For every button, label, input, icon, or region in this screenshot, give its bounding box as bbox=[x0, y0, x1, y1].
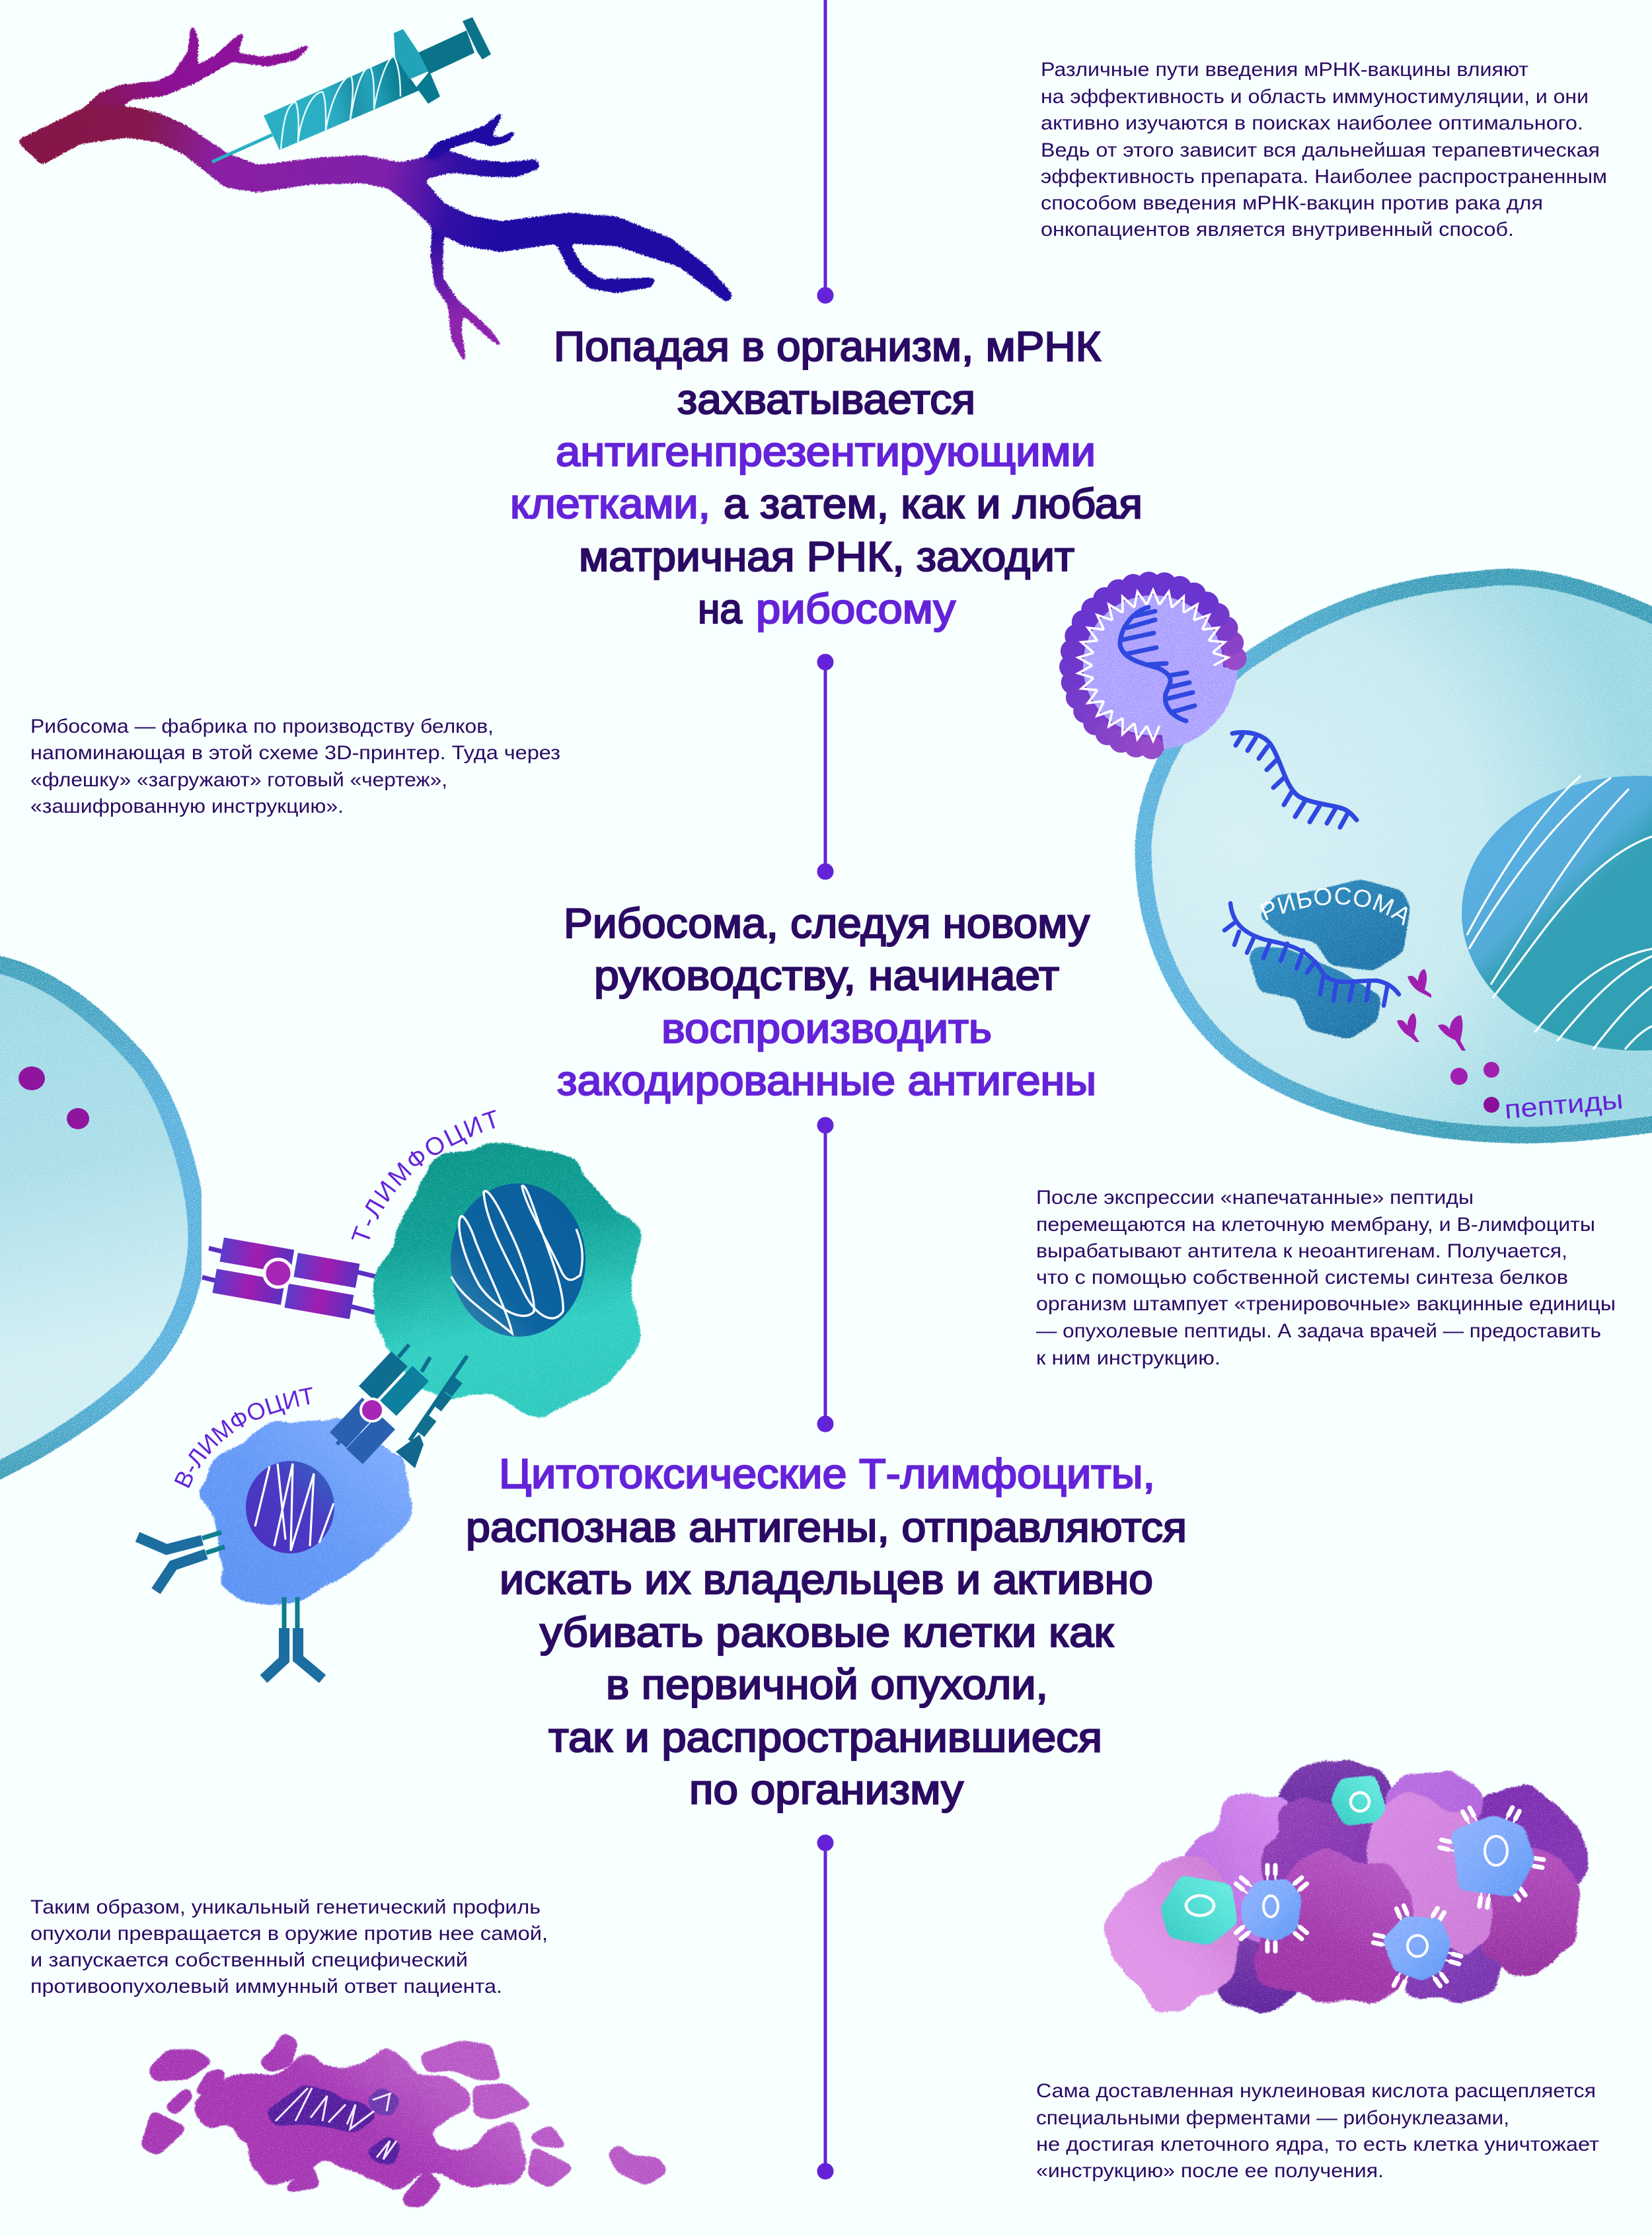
heading: ribosome reproduces antigens: руководству, начинает bbox=[594, 953, 1059, 999]
blue B cell c bbox=[1372, 1905, 1462, 1990]
text block: ribosome explanation bbox=[30, 716, 560, 817]
ribosome label: РИБОСОМА bbox=[1259, 887, 1408, 926]
text block: conclusion left: и запускается собственный специфический bbox=[30, 1949, 468, 1971]
syringe plunger bbox=[415, 30, 474, 74]
text block: peptides and antibodies: к ним инструкцию. bbox=[1036, 1347, 1220, 1369]
heading: cytotoxic T lymphocytes: Цитотоксические Т-лимфоциты, bbox=[499, 1451, 1155, 1497]
heading: mRNA capture: рибосому bbox=[756, 586, 956, 632]
illustration: tumour attacked by lymphocytes bbox=[1104, 1756, 1589, 2015]
heading: cytotoxic T lymphocytes: искать их владельцев и активно bbox=[500, 1557, 1153, 1603]
text block: peptides and antibodies: что с помощью собственной системы синтеза белков bbox=[1036, 1267, 1568, 1288]
heading: mRNA capture: антигенпрезентирующими bbox=[556, 429, 1096, 475]
B cell nucleus bbox=[246, 1461, 334, 1553]
text block: routes of administration: онкопациентов является внутривенный способ. bbox=[1041, 219, 1514, 241]
heading: mRNA capture: а затем, как и любая bbox=[724, 481, 1143, 527]
text block: conclusion left: опухоли превращается в оружие против нее самой, bbox=[30, 1923, 548, 1945]
peptide hearts bbox=[1397, 969, 1466, 1051]
text block: peptides and antibodies: — опухолевые пептиды. А задача врачей — предоставить bbox=[1036, 1320, 1601, 1342]
illustration: B lymphocyte bbox=[135, 1387, 414, 1684]
text block: nucleic acid degradation: специальными ферментами — рибонуклеазами, bbox=[1036, 2107, 1509, 2129]
heading: mRNA capture: клетками, bbox=[510, 481, 710, 527]
text block: routes of administration: Ведь от этого зависит вся дальнейшая терапевтическая bbox=[1041, 139, 1600, 161]
left antibodies bbox=[137, 1532, 225, 1591]
heading: cytotoxic T lymphocytes: по организму bbox=[689, 1767, 964, 1813]
illustration: blood vessel bbox=[21, 27, 730, 361]
text block: routes of administration: эффективность препарата. Наиболее распространенным bbox=[1041, 166, 1607, 188]
illustration: T lymphocyte bbox=[352, 1110, 642, 1419]
heading: mRNA capture: на bbox=[698, 586, 743, 632]
text block: nucleic acid degradation bbox=[1036, 2080, 1599, 2182]
text block: routes of administration: на эффективность и область иммуностимуляции, и они bbox=[1041, 86, 1589, 108]
T cell nucleus bbox=[451, 1183, 585, 1337]
mRNA on ribosome bbox=[1224, 903, 1399, 1006]
tumour cell cluster bbox=[1104, 1756, 1589, 2015]
text block: nucleic acid degradation: Сама доставленная нуклеиновая кислота расщепляется bbox=[1036, 2080, 1596, 2102]
text block: peptides and antibodies bbox=[1036, 1187, 1616, 1369]
heading: cytotoxic T lymphocytes: убивать раковые клетки как bbox=[540, 1610, 1113, 1656]
text block: conclusion left: противоопухолевый иммунный ответ пациента. bbox=[30, 1976, 502, 1997]
white zigzag membrane bbox=[1077, 589, 1229, 741]
teal T cells bbox=[1160, 1775, 1387, 1946]
bumpy lipid ring bbox=[1059, 571, 1248, 760]
text block: peptides and antibodies: перемещаются на клеточную мембрану, и В-лимфоциты bbox=[1036, 1214, 1595, 1236]
ribosome bbox=[1258, 879, 1411, 971]
mRNA inside vesicle bbox=[1120, 607, 1195, 721]
timeline: vertical purple line with dots bbox=[817, 0, 833, 2179]
nucleus fragments bbox=[265, 2084, 402, 2166]
main fragment bbox=[190, 2048, 533, 2194]
heading: ribosome reproduces antigens: Рибосома, следуя новому bbox=[564, 901, 1090, 947]
icon: syringe bbox=[212, 17, 491, 162]
text block: peptides and antibodies: После экспрессии «напечатанные» пептиды bbox=[1036, 1187, 1474, 1209]
heading: cytotoxic T lymphocytes: распознав антигены, отправляются bbox=[466, 1505, 1187, 1551]
nucleus bbox=[1462, 776, 1652, 1051]
text block: conclusion left bbox=[30, 1896, 548, 1997]
T cell body bbox=[370, 1140, 646, 1418]
text block: nucleic acid degradation: не достигая клеточного ядра, то есть клетка уничтожает bbox=[1036, 2134, 1599, 2155]
illustration: left antigen-presenting cell bbox=[0, 961, 197, 1479]
illustration: lipid nanoparticle vesicle bbox=[1059, 571, 1248, 760]
T lymphocyte label: Т-ЛИМФОЦИТ bbox=[352, 1110, 496, 1240]
heading: ribosome reproduces antigens bbox=[557, 901, 1096, 1104]
blue B cell b bbox=[1439, 1807, 1544, 1908]
text block: peptides and antibodies: вырабатывают антитела к неоантигенам. Получается, bbox=[1036, 1240, 1567, 1262]
text block: routes of administration: активно изучаются в поисках наиболее оптимального. bbox=[1041, 112, 1583, 134]
receptor stalk bbox=[410, 1356, 467, 1440]
text block: ribosome explanation: напоминающая в этой схеме 3D-принтер. Туда через bbox=[30, 742, 560, 764]
heading: cytotoxic T lymphocytes bbox=[466, 1451, 1187, 1813]
free mRNA strand bbox=[1232, 732, 1357, 827]
text block: ribosome explanation: «флешку» «загружают» готовый «чертеж», bbox=[30, 769, 447, 791]
illustration: T cell to B cell complex bbox=[330, 1345, 467, 1468]
heading: mRNA capture: захватывается bbox=[677, 377, 975, 423]
illustration: peptide-receptor complex bbox=[202, 1238, 381, 1319]
peptides label: пептиды bbox=[1503, 1085, 1624, 1125]
illustration: antigen-presenting cell bbox=[1134, 568, 1652, 1144]
text block: conclusion left: Таким образом, уникальный генетический профиль bbox=[30, 1896, 541, 1918]
heading: ribosome reproduces antigens: закодированные антигены bbox=[557, 1058, 1096, 1104]
cell body bbox=[1143, 577, 1652, 1135]
B cell body bbox=[197, 1417, 416, 1606]
text block: ribosome explanation: «зашифрованную инструкцию». bbox=[30, 796, 344, 817]
heading: cytotoxic T lymphocytes: в первичной опухоли, bbox=[606, 1662, 1048, 1708]
syringe barrel bbox=[264, 57, 419, 150]
heading: mRNA capture bbox=[510, 324, 1143, 632]
text block: ribosome explanation: Рибосома — фабрика по производству белков, bbox=[30, 716, 494, 737]
text block: routes of administration bbox=[1041, 59, 1607, 241]
peptide dots in left cell bbox=[19, 1066, 89, 1129]
syringe needle bbox=[212, 135, 272, 162]
heading: mRNA capture: Попадая в организм, мРНК bbox=[554, 324, 1101, 370]
B lymphocyte label: В-ЛИМФОЦИТ bbox=[174, 1387, 313, 1488]
illustration: destroyed tumour cell bbox=[139, 2031, 669, 2208]
heading: mRNA capture: матричная РНК, заходит bbox=[579, 534, 1074, 580]
peptide dots bbox=[1450, 1062, 1499, 1113]
text block: peptides and antibodies: организм штампует «тренировочные» вакцинные единицы bbox=[1036, 1293, 1616, 1315]
heading: cytotoxic T lymphocytes: так и распространившиеся bbox=[548, 1715, 1102, 1761]
blue B cell a bbox=[1236, 1865, 1307, 1952]
text block: routes of administration: Различные пути введения мРНК-вакцины влияют bbox=[1041, 59, 1528, 81]
text block: nucleic acid degradation: «инструкцию» после ее получения. bbox=[1036, 2160, 1384, 2182]
bottom antibody bbox=[264, 1597, 322, 1679]
satellite fragments bbox=[139, 2031, 669, 2208]
heading: ribosome reproduces antigens: воспроизводить bbox=[661, 1006, 992, 1052]
text block: routes of administration: способом введения мРНК-вакцин против рака для bbox=[1041, 192, 1543, 214]
